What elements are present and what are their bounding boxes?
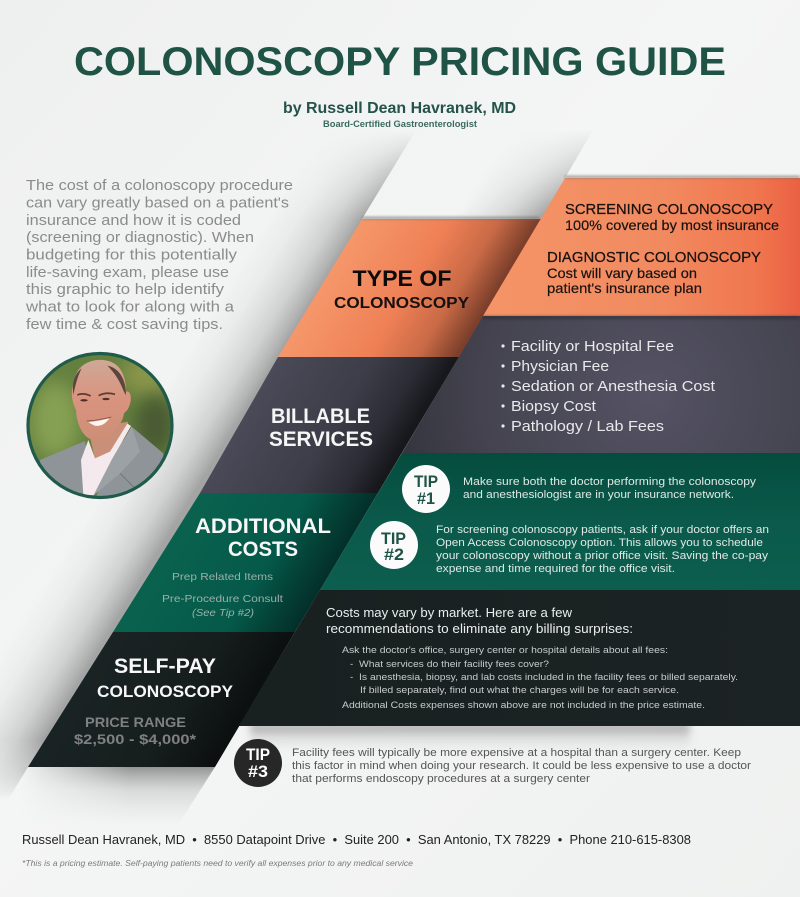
tip 3 badge: TIP bbox=[246, 746, 270, 764]
tip 2 badge: #2 bbox=[384, 546, 404, 564]
panel: screening and diagnostic (right): DIAGNOSTIC COLONOSCOPY bbox=[547, 250, 761, 266]
intro paragraph: few time & cost saving tips. bbox=[26, 316, 223, 333]
panel: additional costs (left): Prep Related Items bbox=[172, 571, 273, 583]
tip 1 badge bbox=[402, 465, 450, 513]
panel: billing recommendations: What services do their facility fees cover? bbox=[359, 659, 549, 670]
intro paragraph bbox=[25, 177, 293, 333]
panel: type of colonoscopy (left) bbox=[278, 217, 541, 357]
credential: Board-Certified Gastroenterologist bbox=[323, 119, 478, 130]
panel: billable services (left): BILLABLE bbox=[271, 405, 370, 428]
panel: additional costs (left): Pre-Procedure Consult bbox=[162, 593, 283, 605]
panel: billing recommendations: Costs may vary by market. Here are a few bbox=[326, 605, 573, 620]
portrait photo bbox=[27, 352, 178, 505]
panel: self-pay colonoscopy (left): COLONOSCOPY bbox=[97, 682, 234, 701]
tip 3 badge bbox=[234, 739, 282, 787]
panel: self-pay colonoscopy (left): PRICE RANGE bbox=[85, 714, 186, 730]
tip 2 text: expense and time required for the office visit. bbox=[436, 563, 675, 575]
panel: billable services list (right): Facility or Hospital Fee bbox=[511, 339, 674, 355]
panel: additional costs (left) bbox=[113, 493, 378, 632]
tip 3 text: that performs endoscopy procedures at a surgery center bbox=[292, 773, 590, 785]
intro paragraph: budgeting for this potentially bbox=[26, 246, 238, 264]
panel: billing recommendations bbox=[239, 590, 800, 726]
panel: screening and diagnostic (right): Cost will vary based on bbox=[547, 265, 697, 281]
panel: billing recommendations: Is anesthesia, biopsy, and lab costs included in the facility fees or billed separately. bbox=[359, 672, 738, 683]
panel: billing recommendations: - bbox=[350, 659, 353, 670]
panel: tips 1 and 2 bbox=[320, 453, 800, 590]
panel: type of colonoscopy (left): COLONOSCOPY bbox=[334, 295, 470, 312]
tip 2 text: For screening colonoscopy patients, ask if your doctor offers an bbox=[436, 524, 769, 536]
tip 2 text bbox=[436, 524, 769, 575]
panel: billable services (left): SERVICES bbox=[269, 428, 373, 451]
panel: self-pay colonoscopy (left) bbox=[28, 632, 295, 767]
tip 2 badge: TIP bbox=[381, 530, 406, 548]
panel: self-pay colonoscopy (left): $2,500 - $4,000* bbox=[74, 731, 197, 747]
panel: billing recommendations: - bbox=[350, 672, 353, 683]
panel: billable services list (right): Physician Fee bbox=[511, 359, 609, 375]
tip 2 text: your colonoscopy without a prior office visit. Saving the co-pay bbox=[436, 550, 769, 562]
tip 3 text: Facility fees will typically be more expensive at a hospital than a surgery center. Keep bbox=[292, 747, 741, 759]
panel: type of colonoscopy (left): TYPE OF bbox=[352, 266, 452, 291]
shadow below costs panel bbox=[250, 724, 690, 752]
tip 2 text: Open Access Colonoscopy option. This allows you to schedule bbox=[436, 537, 763, 549]
tip 3 badge: #3 bbox=[248, 763, 268, 781]
tip 1 text bbox=[463, 476, 757, 501]
byline: by Russell Dean Havranek, MD bbox=[283, 100, 516, 117]
panel: billable services list (right): Sedation or Anesthesia Cost bbox=[511, 379, 715, 395]
panel: billing recommendations: recommendations to eliminate any billing surprises: bbox=[326, 621, 633, 636]
panel: billable services (left) bbox=[200, 357, 459, 493]
tip 2 badge bbox=[370, 521, 418, 569]
tip 3 text bbox=[292, 747, 751, 785]
shadow below self-pay panel bbox=[29, 767, 215, 812]
intro paragraph: this graphic to help identify bbox=[26, 281, 225, 298]
footnote: *This is a pricing estimate. Self-paying patients need to verify all expenses prior to any medical service bbox=[22, 859, 414, 868]
title: COLONOSCOPY PRICING GUIDE bbox=[74, 40, 726, 84]
panel: screening and diagnostic (right): 100% covered by most insurance bbox=[565, 217, 779, 233]
tip 3 text: this factor in mind when doing your research. It could be less expensive to use a doctor bbox=[292, 760, 751, 772]
intro paragraph: (screening or diagnostic). When bbox=[26, 229, 254, 246]
panel: screening and diagnostic (right): patient's insurance plan bbox=[547, 280, 702, 296]
diagonal shadow: second band bbox=[471, 138, 588, 219]
panel: screening and diagnostic (right): SCREENING COLONOSCOPY bbox=[565, 202, 773, 218]
panel: additional costs (left): (See Tip #2) bbox=[192, 607, 254, 619]
tip 1 badge: #1 bbox=[417, 490, 435, 508]
intro paragraph: what to look for along with a bbox=[25, 298, 235, 316]
panel: additional costs (left): ADDITIONAL bbox=[195, 515, 331, 538]
tip 1 text: and anesthesiologist are in your insurance network. bbox=[463, 489, 734, 501]
diagonal shadow: left band bbox=[0, 138, 411, 794]
intro paragraph: The cost of a colonoscopy procedure bbox=[26, 177, 293, 194]
panel: screening and diagnostic (right) bbox=[483, 176, 800, 316]
panel: billable services list (right): Biopsy Cost bbox=[511, 399, 596, 415]
intro paragraph: can vary greatly based on a patient's bbox=[26, 194, 289, 212]
panel: self-pay colonoscopy (left): SELF-PAY bbox=[114, 655, 216, 678]
panel: billing recommendations: If billed separately, find out what the charges will be for each service. bbox=[360, 685, 679, 696]
panel: billable services list (right) bbox=[402, 316, 800, 453]
tip 1 text: Make sure both the doctor performing the colonoscopy bbox=[463, 476, 757, 488]
panel: billing recommendations: Additional Costs expenses shown above are not included in the price estimate. bbox=[342, 700, 705, 711]
panel: billable services list (right): Pathology / Lab Fees bbox=[511, 419, 664, 435]
panel: additional costs (left): COSTS bbox=[228, 538, 298, 561]
footer contact line: Russell Dean Havranek, MD • 8550 Datapoint Drive • Suite 200 • San Antonio, TX 78229 • Phone 210-615-8308 bbox=[22, 832, 691, 847]
tip 1 badge: TIP bbox=[414, 473, 438, 491]
panel: billing recommendations: Ask the doctor's office, surgery center or hospital details about all fees: bbox=[342, 645, 668, 656]
intro paragraph: life-saving exam, please use bbox=[26, 264, 229, 281]
intro paragraph: insurance and how it is coded bbox=[26, 212, 241, 229]
